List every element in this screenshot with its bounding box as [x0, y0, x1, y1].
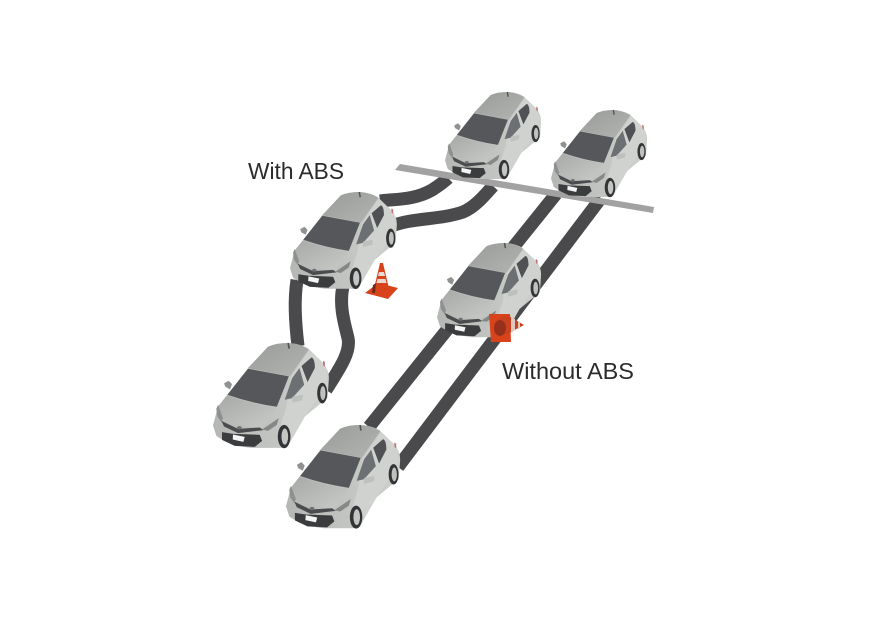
traffic cone: with ABS: [365, 263, 398, 299]
car: without ABS hitting cone: [437, 243, 541, 338]
traffic cone: without ABS, knocked over: [489, 314, 524, 342]
car: with ABS swerving around cone: [290, 192, 397, 289]
car: with ABS at stop line: [445, 92, 541, 179]
car: with ABS starting position: [213, 343, 329, 448]
skid marks: with ABS swerving path: [295, 178, 493, 390]
skid marks: without ABS straight path: [369, 194, 601, 467]
label: Without ABS: Without ABS: [502, 358, 634, 384]
stop line: [395, 164, 654, 213]
label: With ABS: With ABS: [248, 158, 344, 184]
car: without ABS starting position: [286, 425, 400, 529]
car: without ABS at stop line: [551, 110, 647, 197]
